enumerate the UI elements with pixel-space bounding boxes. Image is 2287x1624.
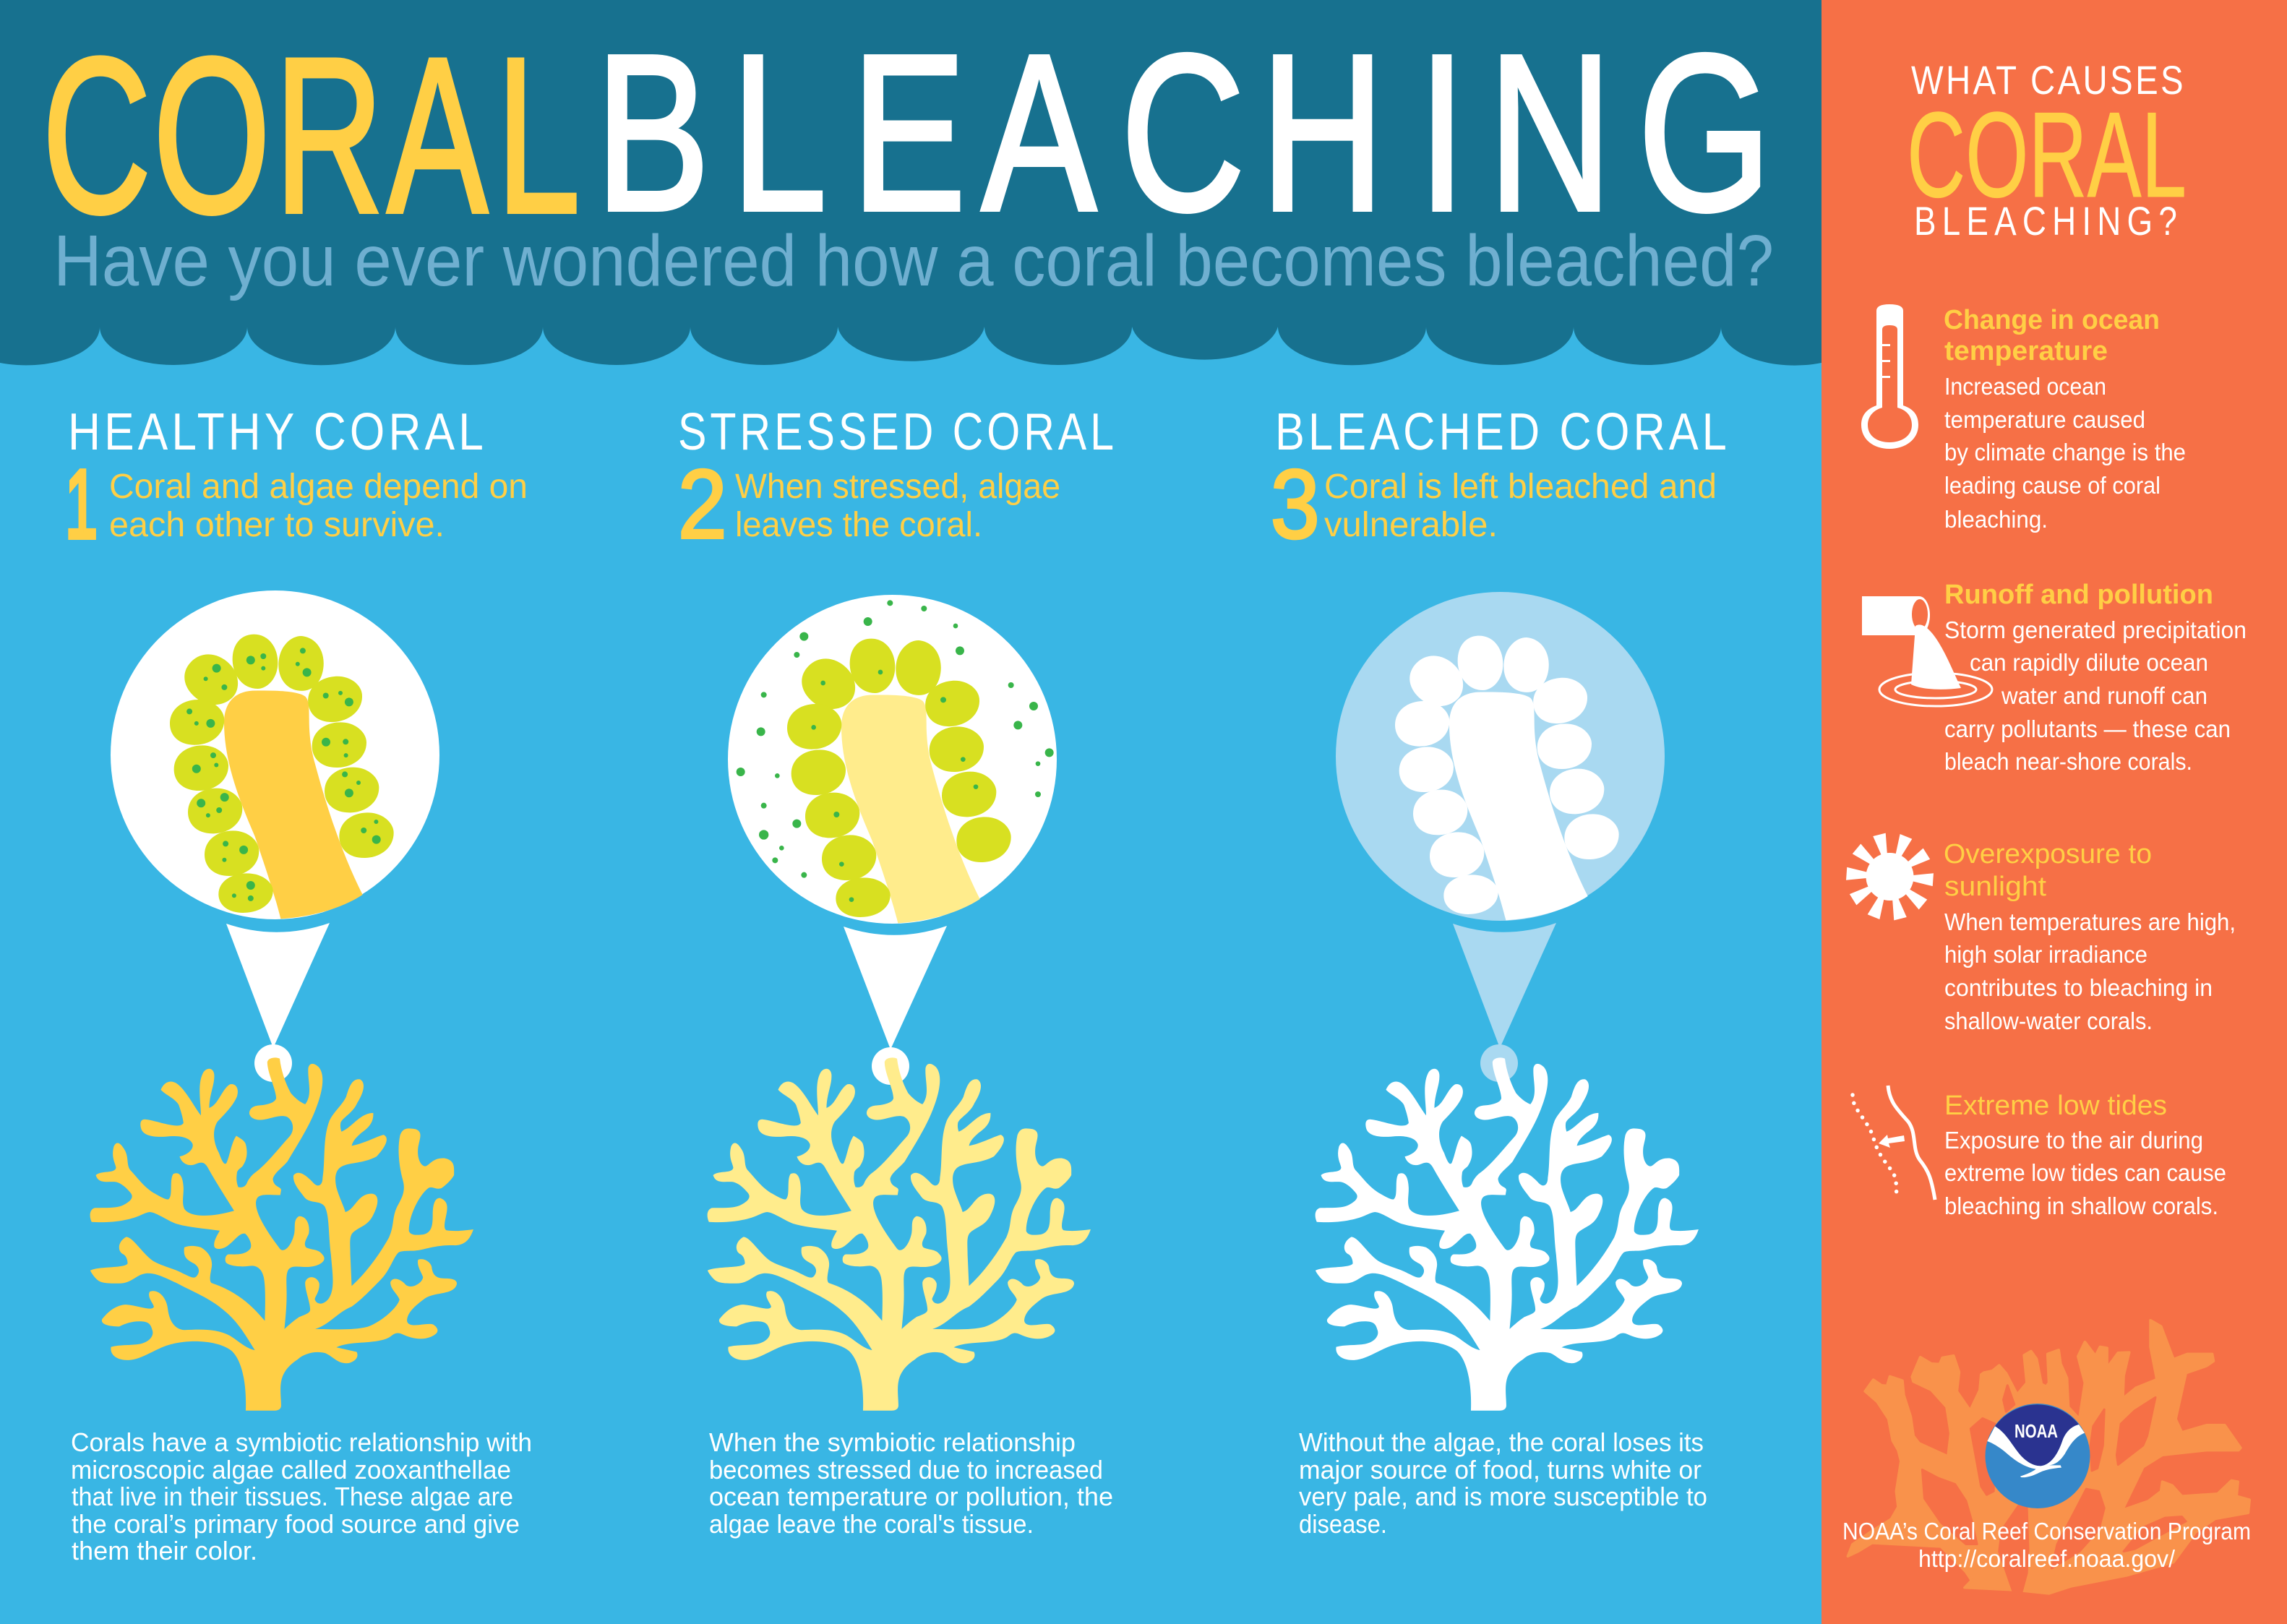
description <box>709 1427 1113 1539</box>
cause: overexposure to sunlight: high solar irradiance <box>1944 941 2147 968</box>
cause: extreme low tides: bleaching in shallow corals. <box>1944 1193 2218 1219</box>
description <box>71 1427 532 1565</box>
panel heading <box>1907 57 2187 244</box>
cause: extreme low tides: Exposure to the air during <box>1944 1127 2203 1153</box>
column: healthy coral <box>65 403 532 1565</box>
number 2: 2 <box>678 450 727 559</box>
coral tissue and algae cells <box>170 632 394 919</box>
panel: what causes coral bleaching <box>1822 0 2287 1624</box>
icon: runoff pipe <box>1862 596 1992 706</box>
cause: ocean temperature: temperature caused <box>1944 406 2145 433</box>
magnified view <box>728 595 1057 1085</box>
coral illustration <box>1316 1057 1699 1411</box>
header band with scalloped edge <box>0 0 1822 366</box>
pointer <box>1453 923 1556 1048</box>
footer coral silhouette <box>1848 1320 2249 1594</box>
cause: ocean temperature: temperature <box>1944 336 2108 366</box>
description: major source of food, turns white or <box>1299 1455 1702 1485</box>
column: bleached coral <box>1271 403 1730 1539</box>
number 3: 3 <box>1271 450 1320 559</box>
magnified view <box>111 590 439 1082</box>
description: ocean temperature or pollution, the <box>709 1482 1113 1511</box>
cause: runoff and pollution: bleach near-shore corals. <box>1944 748 2192 775</box>
cause: overexposure to sunlight: When temperatures are high, <box>1944 908 2236 935</box>
number 1: 1 <box>65 450 98 559</box>
lens circle <box>1336 592 1665 921</box>
intro text <box>1324 468 1717 544</box>
lens circle <box>111 590 439 919</box>
credit <box>1842 1518 2251 1572</box>
coral illustration <box>708 1057 1091 1411</box>
title word: bleaching: BLEACHING <box>596 9 1772 257</box>
cause: ocean temperature <box>1944 305 2186 533</box>
cause: ocean temperature: bleaching. <box>1944 506 2048 533</box>
cause: runoff and pollution: water and runoff can <box>2001 682 2207 709</box>
pointer <box>226 923 330 1048</box>
column: stressed coral <box>678 403 1117 1539</box>
description: When the symbiotic relationship <box>709 1427 1076 1457</box>
expelled algae dots <box>737 600 1054 902</box>
description: that live in their tissues. These algae are <box>72 1482 513 1511</box>
tip highlight <box>872 1047 909 1085</box>
cause: ocean temperature: Change in ocean <box>1944 305 2160 335</box>
description: disease. <box>1299 1509 1387 1539</box>
intro text <box>735 468 1060 544</box>
coral tissue and algae cells <box>737 600 1054 923</box>
water background <box>0 0 1822 1624</box>
heading: stressed coral: STRESSED CORAL <box>678 403 1117 461</box>
description: very pale, and is more susceptible to <box>1299 1482 1707 1511</box>
icon: low tide lines and arrow <box>1853 1086 1935 1200</box>
intro text: When stressed, algae <box>735 468 1060 506</box>
icon: thermometer <box>1861 304 1918 449</box>
panel heading: WHAT CAUSES <box>1911 57 2186 103</box>
cause: ocean temperature: leading cause of coral <box>1944 472 2161 499</box>
description: the coral’s primary food source and give <box>72 1509 520 1539</box>
description <box>1299 1427 1707 1539</box>
cause: ocean temperature: by climate change is the <box>1944 439 2186 465</box>
description: Without the algae, the coral loses its <box>1299 1427 1704 1457</box>
lens circle <box>728 595 1057 924</box>
intro text: Coral and algae depend on <box>109 468 528 506</box>
intro text: leaves the coral. <box>735 506 982 544</box>
zooxanthellae dots <box>186 648 381 901</box>
intro text <box>109 468 528 544</box>
cause: ocean temperature: Increased ocean <box>1944 373 2106 400</box>
pointer <box>844 926 947 1049</box>
coral illustration <box>90 1057 473 1411</box>
credit: http://coralreef.noaa.gov/ <box>1918 1545 2176 1572</box>
cause: overexposure to sunlight: Overexposure to <box>1944 839 2152 869</box>
magnified view <box>1336 592 1665 1082</box>
cause: extreme low tides: extreme low tides can cause <box>1944 1159 2226 1186</box>
intro text: vulnerable. <box>1324 506 1498 544</box>
credit: NOAA’s Coral Reef Conservation Program <box>1842 1518 2251 1544</box>
heading: healthy coral: HEALTHY CORAL <box>68 403 487 461</box>
description: them their color. <box>72 1536 257 1565</box>
panel background <box>1822 0 2287 1624</box>
description: becomes stressed due to increased <box>709 1455 1103 1485</box>
cause: overexposure to sunlight: contributes to bleaching in <box>1944 974 2213 1001</box>
intro text: Coral is left bleached and <box>1324 468 1717 506</box>
cause: runoff and pollution: Runoff and pollution <box>1944 580 2213 610</box>
cause: extreme low tides: Extreme low tides <box>1944 1091 2167 1121</box>
intro text: each other to survive. <box>109 506 445 544</box>
NOAA logo <box>1985 1404 2090 1508</box>
cause: runoff and pollution: Storm generated precipitation <box>1944 616 2247 643</box>
description: microscopic algae called zooxanthellae <box>71 1455 511 1485</box>
title word: coral: CORAL <box>42 12 580 259</box>
description: Corals have a symbiotic relationship with <box>71 1427 532 1457</box>
subtitle: Have you ever wondered how a coral becomes bleached? <box>53 220 1774 301</box>
tip highlight <box>1480 1044 1518 1082</box>
cause: runoff and pollution <box>1944 580 2247 775</box>
panel heading: BLEACHING? <box>1914 198 2183 244</box>
NOAA logo: NOAA <box>2014 1420 2058 1442</box>
cause: runoff and pollution: carry pollutants — these can <box>1944 716 2231 742</box>
coral tissue and empty cells <box>1395 634 1619 920</box>
description: algae leave the coral's tissue. <box>709 1509 1034 1539</box>
title <box>42 9 1772 259</box>
icon: sun <box>1846 833 1934 920</box>
cause: runoff and pollution: can rapidly dilute ocean <box>1970 649 2208 676</box>
cause: overexposure to sunlight <box>1944 839 2236 1034</box>
cause: overexposure to sunlight: sunlight <box>1944 872 2046 902</box>
cause: extreme low tides <box>1944 1091 2226 1219</box>
tip highlight <box>254 1044 292 1082</box>
cause: overexposure to sunlight: shallow-water corals. <box>1944 1008 2153 1034</box>
heading: bleached coral: BLEACHED CORAL <box>1275 403 1730 461</box>
